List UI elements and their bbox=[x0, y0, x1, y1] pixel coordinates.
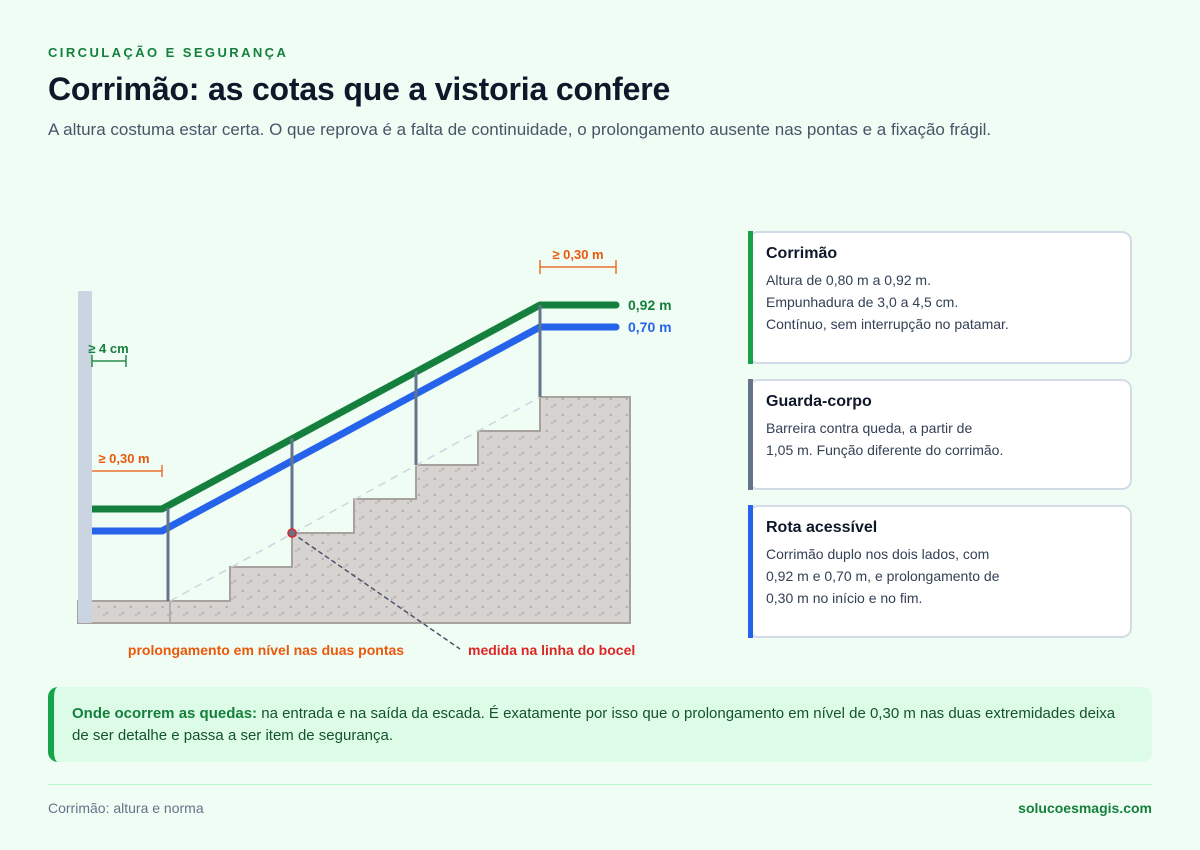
panel: rota acessível bbox=[748, 505, 1132, 638]
heading: Corrimão bbox=[766, 245, 837, 262]
text block bbox=[766, 272, 1009, 332]
dimension: bottom extension bbox=[92, 451, 162, 477]
handrail posts bbox=[168, 305, 540, 601]
text block: 0,92 m e 0,70 m, e prolongamento de bbox=[766, 568, 999, 584]
blue handrail 0,70 m bbox=[84, 327, 616, 531]
label bocel: medida na linha do bocel bbox=[468, 642, 635, 658]
callout: Onde ocorrem as quedas: na entrada e na saída da escada. É exatamente por isso que o prolongamento em nível de 0,30 m nas duas extremidades deixa bbox=[72, 705, 1115, 722]
footer source: Corrimão: altura e norma bbox=[48, 800, 204, 816]
text block: Contínuo, sem interrupção no patamar. bbox=[766, 316, 1009, 332]
title: Corrimão: as cotas que a vistoria confere bbox=[48, 71, 670, 107]
heading: Guarda-corpo bbox=[766, 393, 872, 410]
dimension: top extension bbox=[540, 247, 616, 274]
text block: Empunhadura de 3,0 a 4,5 cm. bbox=[766, 294, 958, 310]
leader to nosing label bbox=[292, 533, 460, 649]
label prolongamento: prolongamento em nível nas duas pontas bbox=[128, 642, 404, 658]
text block: Altura de 0,80 m a 0,92 m. bbox=[766, 272, 931, 288]
text block bbox=[766, 420, 1003, 458]
text block bbox=[766, 546, 999, 606]
concrete stair bbox=[78, 397, 630, 623]
text block: Barreira contra queda, a partir de bbox=[766, 420, 972, 436]
text block: 0,30 m no início e no fim. bbox=[766, 590, 922, 606]
stair handrail diagram bbox=[77, 247, 672, 658]
label 0,92 m: 0,92 m bbox=[628, 297, 672, 313]
text block: Corrimão duplo nos dois lados, com bbox=[766, 546, 989, 562]
dimension: wall clearance: ≥ 4 cm bbox=[88, 341, 129, 356]
callout bbox=[48, 687, 1152, 762]
wall bbox=[78, 291, 92, 623]
green handrail 0,92 m bbox=[84, 305, 616, 509]
nosing point bbox=[288, 529, 296, 537]
dimension: top extension: ≥ 0,30 m bbox=[552, 247, 604, 262]
eyebrow label: CIRCULAÇÃO E SEGURANÇA bbox=[48, 45, 288, 60]
subtitle: A altura costuma estar certa. O que reprova é a falta de continuidade, o prolongamento ausente nas pontas e a fixação frágil. bbox=[48, 120, 991, 139]
panel: guarda-corpo bbox=[748, 379, 1132, 490]
panel: corrimão bbox=[748, 231, 1132, 364]
dimension: wall clearance bbox=[88, 341, 129, 367]
nosing line bbox=[170, 397, 540, 601]
text block: 1,05 m. Função diferente do corrimão. bbox=[766, 442, 1003, 458]
callout: de ser detalhe e passa a ser item de segurança. bbox=[72, 727, 393, 744]
heading: Rota acessível bbox=[766, 519, 877, 536]
label 0,70 m: 0,70 m bbox=[628, 319, 672, 335]
footer rule bbox=[48, 784, 1152, 785]
footer brand: solucoesmagis.com bbox=[1018, 800, 1152, 816]
dimension: bottom extension: ≥ 0,30 m bbox=[98, 451, 150, 466]
